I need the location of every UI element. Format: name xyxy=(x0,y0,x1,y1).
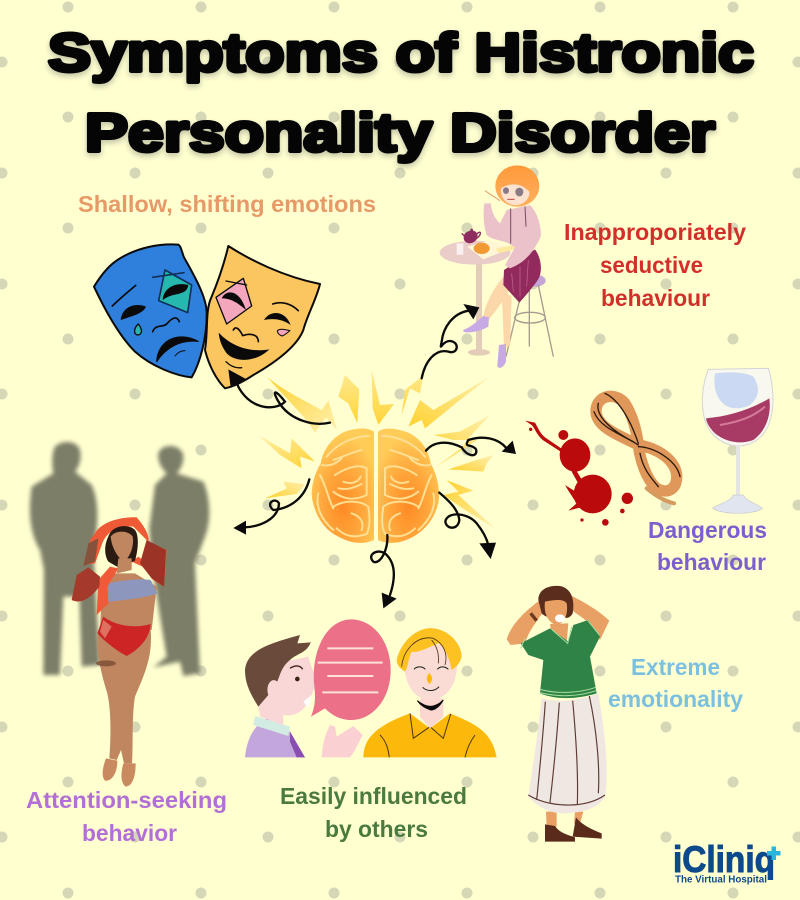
icon: blurred male silhouettes xyxy=(30,442,209,676)
smudge on hip xyxy=(96,660,116,666)
label: easily influenced by others xyxy=(280,783,467,842)
label: extreme emotionality xyxy=(608,654,743,712)
skirt xyxy=(528,693,607,813)
icon: coiled rope xyxy=(594,393,680,503)
title: Personality Disorder xyxy=(85,106,715,166)
label: dangerous behaviour: Dangerous xyxy=(648,517,767,543)
sweater xyxy=(484,203,541,268)
icon: distressed woman xyxy=(507,586,609,842)
blue tragedy mask xyxy=(94,244,207,377)
jacket xyxy=(97,557,157,615)
torso xyxy=(100,573,157,630)
legs and shoes xyxy=(483,277,512,320)
arms xyxy=(507,601,543,645)
bikini top xyxy=(108,579,157,602)
calves xyxy=(546,812,583,827)
legs xyxy=(97,630,151,763)
logo: iCliniq: The Virtual Hospital xyxy=(675,874,767,886)
icon: glowing brain xyxy=(312,429,439,543)
icon: wine glass xyxy=(702,368,773,513)
shoes xyxy=(103,758,117,781)
label: dangerous behaviour xyxy=(648,517,767,575)
arrow: brain to attention seeking xyxy=(233,479,309,535)
label: inappropriately seductive behaviour: Inapproporiately xyxy=(564,219,746,245)
green top xyxy=(521,620,600,698)
yellow comedy mask xyxy=(205,246,320,388)
head and hair xyxy=(105,526,138,568)
hand xyxy=(322,725,363,757)
label: inappropriately seductive behaviour: seductive xyxy=(600,252,703,278)
arrow: brain to easily influenced xyxy=(371,535,397,608)
right man xyxy=(363,628,497,757)
label: extreme emotionality: Extreme xyxy=(631,654,720,680)
icon: comedy and tragedy masks xyxy=(94,244,320,388)
title: Symptoms of Histronic xyxy=(48,23,754,83)
label: attention seeking behavior xyxy=(26,787,227,846)
arrow: brain to masks xyxy=(228,369,330,424)
label: dangerous behaviour: behaviour xyxy=(657,549,766,575)
label: attention seeking behavior: behavior xyxy=(82,820,177,846)
head xyxy=(538,586,573,618)
label: easily influenced by others: by others xyxy=(325,816,428,842)
left man xyxy=(245,635,319,757)
skirt xyxy=(503,249,541,303)
label: inappropriately seductive behaviour: behaviour xyxy=(601,285,710,311)
label: shallow shifting emotions: Shallow, shifting emotions xyxy=(78,191,376,217)
icon: woman at cafe table xyxy=(440,165,553,368)
bracelet xyxy=(531,613,537,621)
icon: attention seeking woman xyxy=(72,517,167,787)
arrow: brain to dangerous items xyxy=(426,438,516,455)
briefs xyxy=(97,617,151,656)
icon: two people talking xyxy=(245,619,497,757)
label: attention seeking behavior: Attention-seeking xyxy=(26,787,227,813)
arrow: brain to extreme emotionality xyxy=(439,493,496,559)
title xyxy=(48,23,754,166)
label: extreme emotionality: emotionality xyxy=(608,686,743,712)
head and hair xyxy=(495,165,539,207)
label: easily influenced by others: Easily influenced xyxy=(280,783,467,809)
arrow: brain to woman at table xyxy=(422,304,479,378)
title: Symptoms of Histronic xyxy=(48,26,754,86)
logo: iCliniq: iCliniq xyxy=(673,839,775,880)
stool xyxy=(506,275,553,357)
lightning bolts xyxy=(258,370,495,528)
title: Personality Disorder xyxy=(85,103,715,163)
label: inappropriately seductive behaviour xyxy=(564,219,746,311)
speech bubble xyxy=(311,619,391,720)
table xyxy=(440,229,516,356)
icon: blood splatter xyxy=(525,421,633,526)
feet xyxy=(545,824,575,842)
